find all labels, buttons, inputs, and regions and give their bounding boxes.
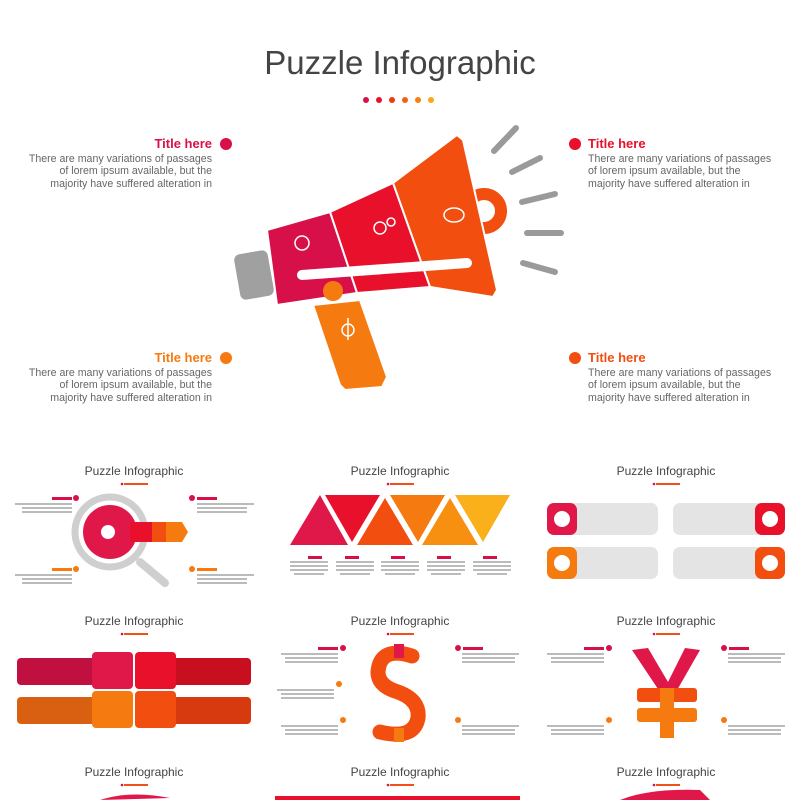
text: Puzzle Infographic: [617, 614, 715, 628]
text block bottom-right: [588, 350, 771, 404]
text block bottom-left: [29, 350, 212, 404]
text block top-right: majority have suffered alteration in: [588, 178, 750, 190]
text: Puzzle Infographic: [85, 765, 183, 779]
text: Puzzle Infographic: [351, 765, 449, 779]
title: Puzzle Infographic: [264, 44, 536, 81]
megaphone: [234, 125, 564, 389]
text: Puzzle Infographic: [351, 464, 449, 478]
text block bottom-right: Title here: [588, 350, 646, 365]
text block bottom-left: There are many variations of passages: [29, 367, 212, 379]
title dots: [363, 97, 434, 103]
text block top-left: majority have suffered alteration in: [50, 178, 212, 190]
text block top-left: Title here: [154, 136, 212, 151]
text block top-right: [588, 136, 771, 190]
text: Puzzle Infographic: [351, 614, 449, 628]
text block top-right: There are many variations of passages: [588, 153, 771, 165]
thumbnails graphics: [15, 482, 785, 800]
thumbnail titles: Puzzle Infographic: [85, 464, 183, 478]
text block bottom-right: of lorem ipsum available, but the: [588, 379, 741, 391]
markers: [220, 138, 581, 364]
text block top-right: of lorem ipsum available, but the: [588, 165, 741, 177]
text block top-left: There are many variations of passages: [29, 153, 212, 165]
text: Puzzle Infographic: [85, 614, 183, 628]
text block bottom-left: of lorem ipsum available, but the: [59, 379, 212, 391]
text block bottom-left: majority have suffered alteration in: [50, 392, 212, 404]
text block bottom-right: There are many variations of passages: [588, 367, 771, 379]
text block top-left: of lorem ipsum available, but the: [59, 165, 212, 177]
text: Puzzle Infographic: [617, 464, 715, 478]
text block bottom-left: Title here: [154, 350, 212, 365]
text block top-left: [29, 136, 212, 190]
text block top-right: Title here: [588, 136, 646, 151]
text: Puzzle Infographic: [617, 765, 715, 779]
text block bottom-right: majority have suffered alteration in: [588, 392, 750, 404]
